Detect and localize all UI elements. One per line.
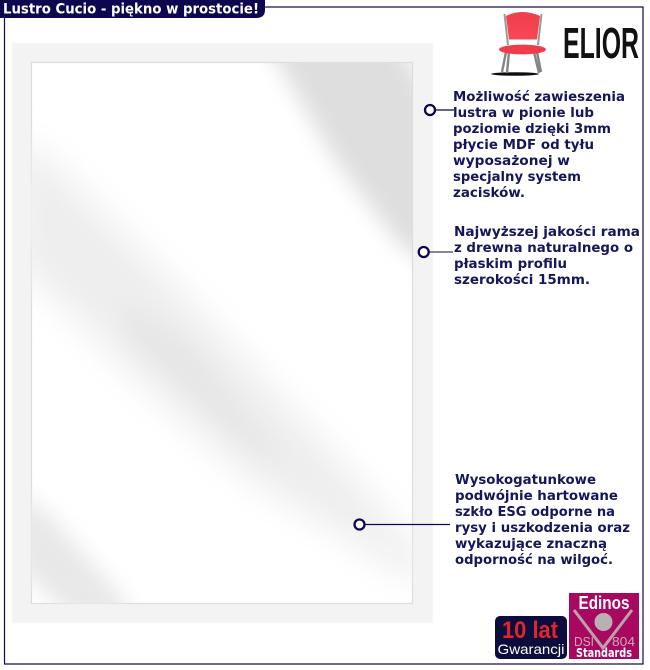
callout 3 text: Wysokogatunkowe — [455, 472, 596, 488]
callout 2 text: szerokości 15mm. — [454, 272, 590, 288]
callout 1 text: zacisków. — [453, 185, 525, 201]
title banner: Lustro Cucio - piękno w prostocie! — [3, 2, 259, 18]
callout 1 marker — [425, 105, 454, 115]
callout 3 text: odporność na wilgoć. — [455, 552, 613, 568]
callout 1 text: lustra w pionie lub — [453, 105, 594, 121]
callout 3 text: rysy i uszkodzenia oraz — [455, 520, 630, 536]
callout 3 text — [455, 472, 630, 568]
badge: Edinos standards: Edinos — [578, 593, 630, 613]
callout 2 text — [454, 224, 640, 288]
callout 1 text — [453, 89, 625, 201]
badge: 10 year warranty: Gwarancji — [498, 641, 564, 657]
callout 1 text: Możliwość zawieszenia — [453, 89, 625, 105]
icon: red chair logo — [491, 12, 546, 76]
badge: 10 year warranty: 10 lat — [502, 617, 558, 644]
callout 3 text: wykazujące znaczną — [455, 536, 607, 552]
mirror glass — [32, 62, 412, 604]
badge: Edinos standards: 804 — [612, 634, 635, 649]
callout 2 text: Najwyższej jakości rama — [454, 224, 640, 240]
badge: Edinos standards: DSI — [574, 634, 594, 649]
callout 2 text: płaskim profilu — [454, 256, 567, 272]
callout 1 text: poziomie dzięki 3mm — [453, 121, 611, 137]
mirror reflections — [31, 63, 413, 604]
badge: Edinos standards — [569, 593, 639, 660]
badge: 10 year warranty — [495, 616, 567, 659]
callout 2 text: z drewna naturalnego o — [454, 240, 633, 256]
badge: Edinos standards: Standards — [576, 646, 632, 660]
callout 2 marker — [419, 247, 453, 257]
callout 3 marker — [354, 520, 450, 530]
mirror — [12, 40, 440, 625]
callout 1 text: specjalny system — [453, 169, 581, 185]
mirror frame — [12, 43, 433, 623]
callout 3 text: podwójnie hartowane — [455, 488, 618, 504]
callout 3 text: szkło ESG odporne na — [455, 504, 615, 520]
callout 1 text: płycie MDF od tyłu — [453, 137, 594, 153]
callout 1 text: wyposażonej w — [453, 153, 570, 169]
